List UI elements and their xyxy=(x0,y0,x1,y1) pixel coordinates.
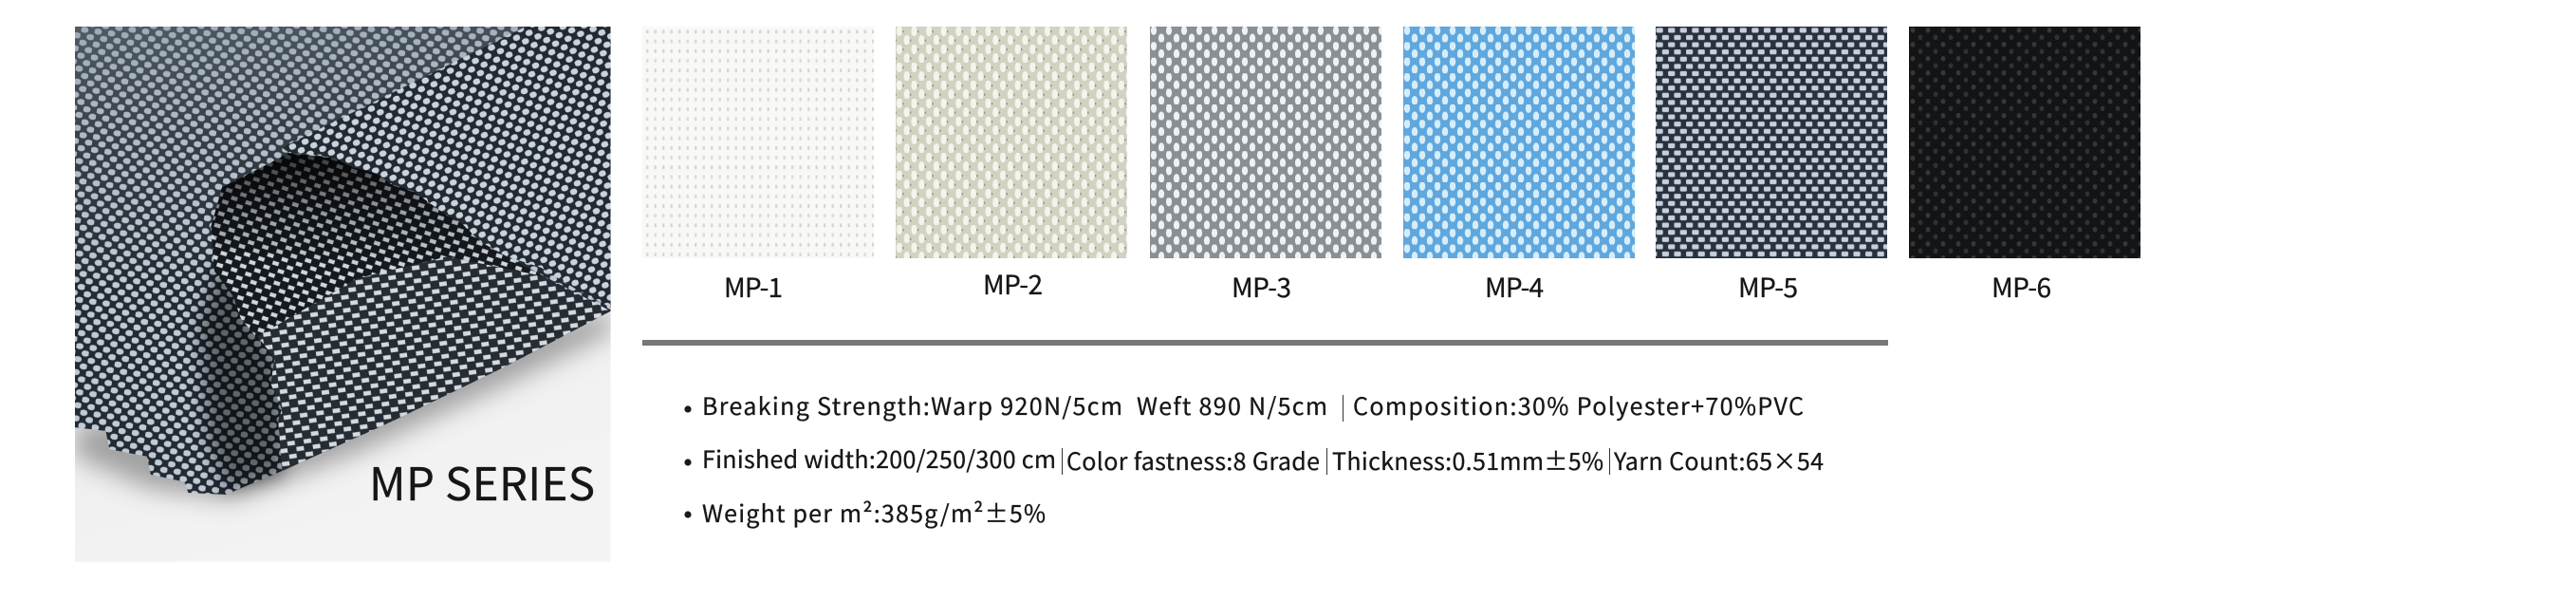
swatch: MP-6 xyxy=(1909,27,2140,306)
swatch: MP-3 xyxy=(1150,27,1381,306)
spec line 1 xyxy=(684,388,1804,423)
spec line 3: Weight per m²:385g/m²±5% xyxy=(702,496,1046,530)
panel: fabric photo xyxy=(75,27,611,562)
spec line 2: Color fastness:8 Grade xyxy=(1066,443,1320,478)
spec line 2: Finished width:200/250/300 cm xyxy=(702,441,1056,476)
spec line 2: Yarn Count:65×54 xyxy=(1613,443,1824,478)
spec line 1: Composition:30% Polyester+70%PVC xyxy=(1353,388,1804,423)
swatch: MP-5: MP-5 xyxy=(1738,268,1798,306)
swatch: MP-4: MP-4 xyxy=(1485,268,1544,306)
swatch: MP-5 xyxy=(1656,27,1887,306)
swatch: MP-1 xyxy=(642,27,874,306)
spec line 1: Weft 890 N/5cm xyxy=(1137,388,1327,423)
spec line 2: Thickness:0.51mm±5% xyxy=(1332,443,1603,478)
swatch: MP-2 xyxy=(896,27,1127,303)
swatch: MP-3: MP-3 xyxy=(1232,268,1291,306)
title: MP SERIES: MP SERIES xyxy=(369,448,595,514)
swatch: MP-2: MP-2 xyxy=(983,265,1043,303)
photo: folded fabric xyxy=(75,27,611,562)
swatch: MP-6: MP-6 xyxy=(1992,268,2051,306)
swatch: MP-1: MP-1 xyxy=(724,268,783,306)
divider rule xyxy=(642,340,1888,346)
swatch: MP-4 xyxy=(1403,27,1635,306)
spec line 1: Breaking Strength:Warp 920N/5cm xyxy=(702,388,1122,423)
spec line 2 xyxy=(684,441,1824,478)
